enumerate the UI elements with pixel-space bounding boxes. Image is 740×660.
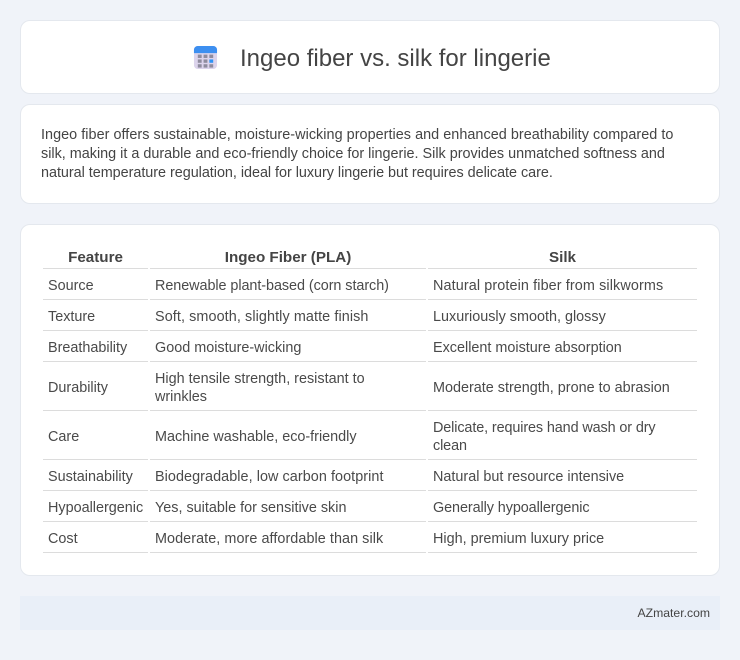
icon: calendar <box>194 46 218 69</box>
row: Source: Natural protein fiber from silkworms <box>433 278 663 294</box>
row: Care: Machine washable, eco-friendly <box>155 429 357 445</box>
title: Ingeo fiber vs. silk for lingerie <box>240 45 551 72</box>
table header: Ingeo Fiber (PLA) <box>225 249 351 266</box>
row: Source: Source <box>48 278 94 294</box>
row: Hypoallergenic: Yes, suitable for sensitive skin <box>155 500 346 516</box>
row: Texture <box>48 309 606 325</box>
row: Sustainability <box>48 469 624 485</box>
row: Sustainability: Sustainability <box>48 469 133 485</box>
row: Durability: wrinkles <box>155 389 207 405</box>
row: Sustainability: Biodegradable, low carbon footprint <box>155 469 384 485</box>
text block: summary: silk, making it a durable and eco-friendly choice for lingerie. Silk provides unmatched softness and <box>41 146 665 162</box>
row: Cost: Cost <box>48 531 78 547</box>
row: Breathability: Breathability <box>48 340 127 356</box>
row: Cost <box>48 531 604 547</box>
row: Durability: Durability <box>48 380 108 396</box>
row: Source: Renewable plant-based (corn starch) <box>155 278 389 294</box>
row: Breathability: Good moisture-wicking <box>155 340 301 356</box>
text block: summary: Ingeo fiber offers sustainable, moisture-wicking properties and enhanced breathability compared to <box>41 127 673 143</box>
row: Care: clean <box>433 438 467 454</box>
footer credit: AZmater.com <box>638 606 710 620</box>
row: Care <box>48 420 656 454</box>
row: Cost: High, premium luxury price <box>433 531 604 547</box>
row: Hypoallergenic: Generally hypoallergenic <box>433 500 589 516</box>
text block: summary <box>41 127 673 181</box>
row: Texture: Soft, smooth, slightly matte finish <box>155 309 369 325</box>
row: Breathability <box>48 340 622 356</box>
row: Breathability: Excellent moisture absorption <box>433 340 622 356</box>
row: Durability: Moderate strength, prone to abrasion <box>433 380 670 396</box>
panel: comparison table <box>20 224 720 576</box>
row: Care: Care <box>48 429 79 445</box>
table header: Silk <box>549 249 576 266</box>
row: Durability: High tensile strength, resistant to <box>155 371 365 387</box>
row: Hypoallergenic: Hypoallergenic <box>48 500 143 516</box>
row: Texture: Luxuriously smooth, glossy <box>433 309 606 325</box>
row: Texture: Texture <box>48 309 95 325</box>
row: Hypoallergenic <box>48 500 590 516</box>
text block: summary: natural temperature regulation, ideal for luxury lingerie but requires delicate care. <box>41 165 553 181</box>
row: Cost: Moderate, more affordable than silk <box>155 531 383 547</box>
panel: title header <box>20 20 720 94</box>
row: Source <box>48 278 663 294</box>
panel: intro text <box>20 104 720 204</box>
row: Durability <box>48 371 670 405</box>
row: Care: Delicate, requires hand wash or dry <box>433 420 656 436</box>
row: Sustainability: Natural but resource intensive <box>433 469 624 485</box>
footer bar <box>20 596 720 630</box>
table header: Feature <box>68 249 123 266</box>
table header <box>68 249 576 266</box>
